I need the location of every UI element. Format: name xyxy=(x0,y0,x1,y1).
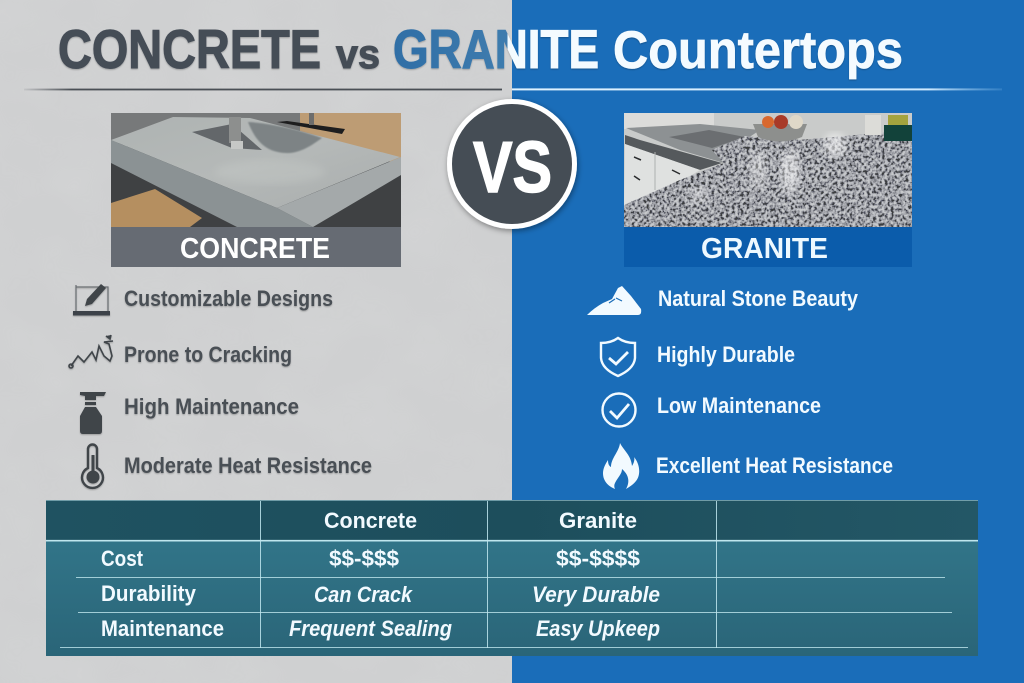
text: High Maintenance: High Maintenance xyxy=(124,394,299,419)
label band: CONCRETE: CONCRETE xyxy=(180,233,330,265)
panel: granite photo card xyxy=(624,113,912,267)
table row: Cost: $$-$$$$ xyxy=(556,546,640,571)
label band: GRANITE xyxy=(624,227,912,267)
icon: flame xyxy=(603,443,639,489)
icon: mountain xyxy=(587,286,641,315)
icon: shield with check xyxy=(601,338,635,376)
table header row xyxy=(46,500,978,541)
concrete feature list xyxy=(69,284,372,488)
label band: GRANITE: GRANITE xyxy=(701,233,828,265)
photo: concrete countertop xyxy=(111,113,401,227)
table header row: Granite xyxy=(559,508,637,533)
title: GRANITE xyxy=(393,18,599,80)
label band: CONCRETE xyxy=(111,227,401,267)
text: Low Maintenance: Low Maintenance xyxy=(657,393,821,418)
comparison table xyxy=(46,500,978,656)
photo: granite countertop xyxy=(624,113,912,227)
icon: pencil and drafting board xyxy=(73,284,110,316)
title: Countertops xyxy=(613,21,903,80)
title: CONCRETE xyxy=(58,18,321,80)
table row: Cost xyxy=(101,546,640,571)
table row: Maintenance xyxy=(101,616,660,641)
title xyxy=(58,18,903,80)
table row: Maintenance: Easy Upkeep xyxy=(536,616,660,641)
granite feature list xyxy=(587,286,893,489)
background: granite half xyxy=(512,0,1024,683)
text: Natural Stone Beauty: Natural Stone Beauty xyxy=(658,286,859,311)
VS badge xyxy=(450,102,574,226)
text: Customizable Designs: Customizable Designs xyxy=(124,286,333,311)
icon: thermometer xyxy=(82,444,103,488)
table row: Cost: Cost xyxy=(101,546,144,571)
table row: Cost: $$-$$$ xyxy=(329,546,399,571)
table row: Durability xyxy=(101,581,660,607)
table row: Durability: Very Durable xyxy=(532,582,660,607)
background: concrete half xyxy=(0,0,512,683)
panel: concrete photo card xyxy=(111,113,401,267)
text: Highly Durable: Highly Durable xyxy=(657,342,795,367)
table row: Maintenance: Frequent Sealing xyxy=(289,616,453,641)
title: vs xyxy=(336,31,380,77)
table row: Durability: Can Crack xyxy=(314,582,414,607)
text: Prone to Cracking: Prone to Cracking xyxy=(124,342,292,367)
table row: Maintenance: Maintenance xyxy=(101,616,224,641)
VS badge: VS xyxy=(473,128,552,208)
icon: check circle xyxy=(602,394,636,426)
text: Moderate Heat Resistance: Moderate Heat Resistance xyxy=(124,453,372,478)
text: Excellent Heat Resistance: Excellent Heat Resistance xyxy=(656,453,893,478)
icon: crack line xyxy=(69,335,113,368)
icon: spray bottle xyxy=(80,392,106,434)
table row: Durability: Durability xyxy=(101,581,197,606)
table header row: Concrete xyxy=(324,508,417,533)
